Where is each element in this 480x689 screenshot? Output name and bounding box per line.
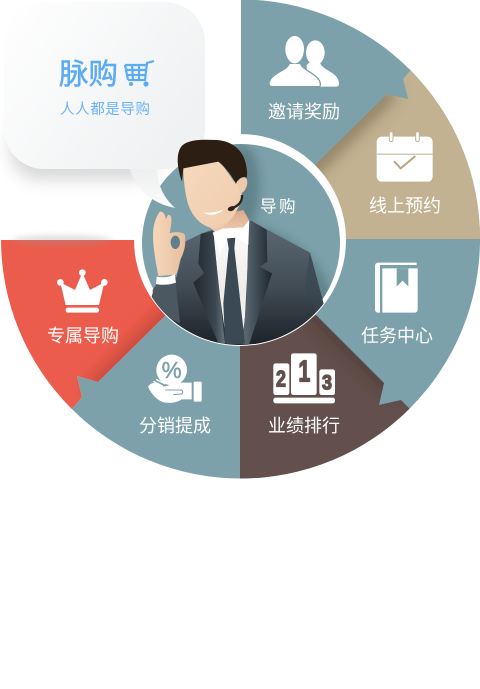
icon: calendar with check (377, 132, 433, 182)
icon: crown (57, 269, 108, 313)
portrait: customer guide (130, 140, 343, 363)
icon: hand holding percent coin: % (162, 357, 182, 383)
task center item (361, 263, 433, 346)
necktie (223, 238, 245, 343)
icon: two people (269, 35, 339, 87)
label: task center: 任务中心 (361, 326, 433, 346)
icon: book with bookmark (375, 263, 418, 313)
suit (152, 220, 324, 345)
hair (178, 140, 247, 184)
ear (237, 177, 247, 193)
icon: shopping cart (125, 61, 154, 87)
exclusive guide item (47, 269, 119, 346)
speech bubble (4, 2, 205, 208)
shadow above red sector (12, 235, 112, 245)
icon: podium: 3 (322, 370, 332, 394)
icon: podium (273, 353, 335, 403)
headset (229, 195, 242, 209)
label: distribution commission: 分销提成 (139, 416, 211, 436)
speech bubble shadow (10, 110, 160, 180)
label: invite rewards: 邀请奖励 (268, 102, 340, 122)
icon: podium: 2 (276, 366, 286, 392)
center disc (142, 144, 340, 342)
shirt (213, 219, 249, 343)
face (183, 161, 242, 228)
hand hole (171, 236, 180, 249)
bubble tail (129, 166, 175, 208)
panel: task center sector (242, 242, 480, 478)
panel: invite rewards sector background (241, 0, 480, 245)
online booking item (369, 132, 441, 216)
panel: distribution commission sector (72, 316, 240, 478)
icon: podium: 1 (298, 355, 310, 389)
invite rewards item (268, 35, 340, 122)
ranking item (268, 353, 340, 436)
logo tagline: 人人都是导购 (60, 101, 150, 118)
left lapel (193, 231, 225, 343)
neck (202, 210, 249, 237)
figure shadow on disc (232, 144, 332, 299)
shirt cuff (156, 274, 176, 285)
right lapel (243, 219, 272, 344)
label: guide: 导购 (260, 197, 296, 216)
label: ranking: 业绩排行 (268, 416, 340, 436)
label: online booking: 线上预约 (369, 196, 441, 216)
center ring (134, 134, 346, 346)
hand OK gesture (153, 212, 185, 276)
mouth (203, 209, 223, 215)
distribution commission item (139, 355, 211, 436)
panel: online booking sector (315, 70, 480, 239)
infographic wheel (0, 0, 480, 500)
panel: ranking sector (240, 315, 410, 478)
bubble body (4, 2, 205, 169)
label: exclusive guide: 专属导购 (47, 326, 119, 346)
collar (213, 219, 249, 254)
logo wordmark: 脉购 (59, 58, 118, 91)
panel: exclusive guide sector (1, 240, 166, 409)
